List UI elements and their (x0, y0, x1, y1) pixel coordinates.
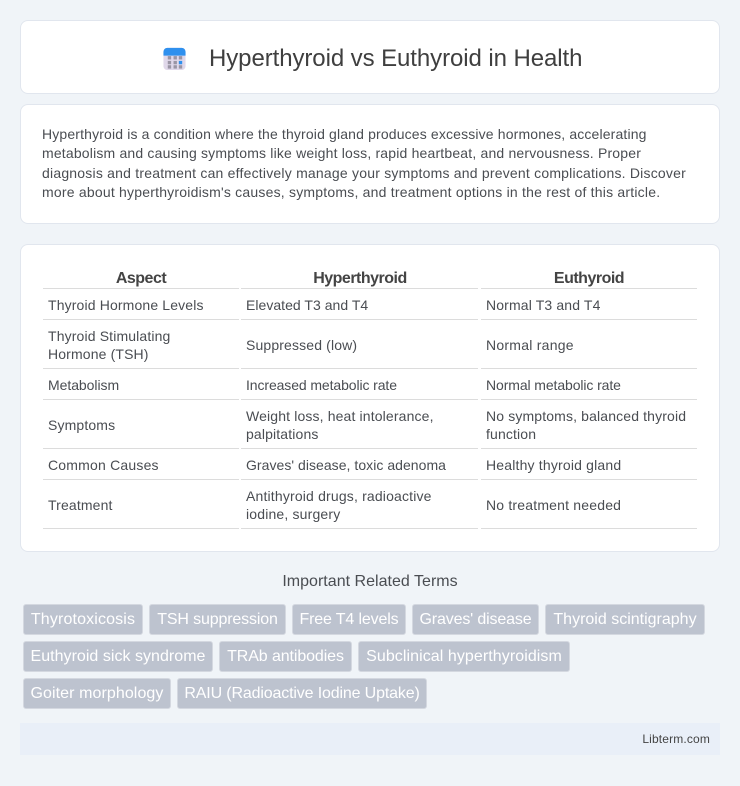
row: thyroid hormone levels: Normal T3 and T4 (486, 297, 601, 313)
table header (116, 270, 624, 287)
row: TSH: Suppressed (low) (246, 337, 357, 353)
icon: calendar (163, 48, 186, 70)
table header: Euthyroid (554, 270, 624, 287)
table header: Aspect (116, 270, 166, 287)
table header: Hyperthyroid (313, 270, 407, 287)
tag: Euthyroid sick syndrome (30, 648, 205, 665)
tag (358, 641, 570, 672)
row: treatment: iodine, surgery (246, 506, 340, 522)
tag: Thyroid scintigraphy (553, 611, 697, 628)
row: thyroid hormone levels (48, 297, 601, 313)
tag: Goiter morphology (30, 685, 163, 702)
tag (23, 641, 213, 672)
row: symptoms: No symptoms, balanced thyroid (486, 408, 686, 424)
comparison table panel (20, 244, 720, 552)
row: metabolism: Metabolism (48, 377, 119, 393)
row: TSH: Thyroid Stimulating (48, 328, 170, 344)
title: Hyperthyroid vs Euthyroid in Health (209, 45, 582, 72)
row: metabolism (48, 377, 621, 393)
related terms heading: Important Related Terms (282, 573, 458, 590)
title card (20, 20, 720, 94)
row: metabolism: Increased metabolic rate (246, 377, 397, 393)
tag: Free T4 levels (300, 611, 398, 628)
tag: Thyrotoxicosis (31, 611, 135, 628)
tag (23, 678, 171, 709)
row: thyroid hormone levels: Elevated T3 and T4 (246, 297, 368, 313)
row: symptoms: Symptoms (48, 417, 115, 433)
row: thyroid hormone levels: Thyroid Hormone Levels (48, 297, 204, 313)
footer credit: Libterm.com (642, 732, 710, 746)
row: symptoms: Weight loss, heat intolerance, (246, 408, 434, 424)
tag: TRAb antibodies (227, 648, 344, 665)
row: TSH: Normal range (486, 337, 574, 353)
footer bar (20, 723, 720, 755)
row: treatment: Antithyroid drugs, radioactive (246, 488, 432, 504)
intro text panel (20, 104, 720, 224)
intro paragraph: Hyperthyroid is a condition where the thyroid gland produces excessive hormones, accelerating (42, 126, 647, 142)
tag: RAIU (Radioactive Iodine Uptake) (184, 685, 420, 702)
row: symptoms: palpitations (246, 426, 319, 442)
intro paragraph: metabolism and causing symptoms like weight loss, rapid heartbeat, and nervousness. Proper (42, 145, 641, 161)
row: treatment: Treatment (48, 497, 113, 513)
tag: Subclinical hyperthyroidism (366, 648, 562, 665)
row: common causes: Healthy thyroid gland (486, 457, 621, 473)
tag: TSH suppression (157, 611, 278, 628)
tag (23, 604, 143, 635)
row: TSH (48, 328, 574, 362)
intro paragraph: more about hyperthyroidism's causes, symptoms, and treatment options in the rest of this article. (42, 184, 660, 200)
row: treatment: No treatment needed (486, 497, 621, 513)
related terms tags (23, 604, 705, 709)
intro paragraph (42, 126, 686, 200)
tag (545, 604, 705, 635)
tag (292, 604, 406, 635)
row: TSH: Hormone (TSH) (48, 346, 149, 362)
tag (219, 641, 352, 672)
row: common causes: Common Causes (48, 457, 159, 473)
row: symptoms: function (486, 426, 536, 442)
row: symptoms (48, 408, 686, 442)
tag (412, 604, 539, 635)
row: treatment (48, 488, 621, 522)
row: common causes (48, 457, 621, 473)
tag (177, 678, 427, 709)
tag: Graves' disease (420, 611, 531, 628)
intro paragraph: diagnosis and treatment can effectively manage your symptoms and prevent complications. Discover (42, 164, 686, 180)
tag (149, 604, 286, 635)
row: common causes: Graves' disease, toxic adenoma (246, 457, 446, 473)
row: metabolism: Normal metabolic rate (486, 377, 621, 393)
